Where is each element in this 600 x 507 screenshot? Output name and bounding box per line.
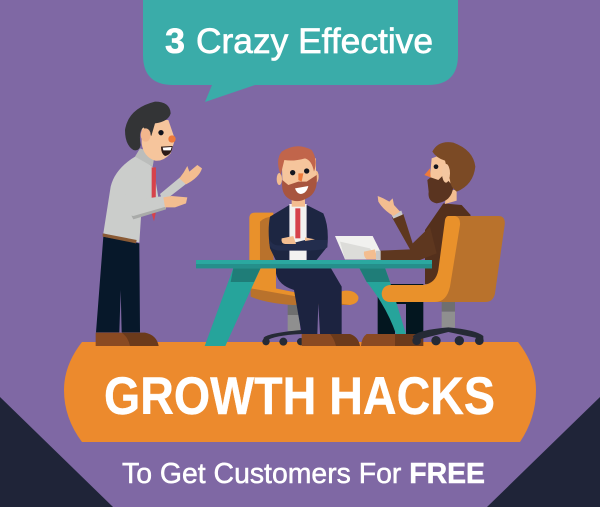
face	[282, 158, 316, 195]
neck	[135, 148, 155, 167]
mouth	[161, 146, 173, 156]
mouth	[295, 186, 308, 194]
near arm	[124, 175, 166, 216]
speech bubble	[143, 0, 458, 102]
corner triangle: right	[487, 397, 600, 507]
standing man	[96, 102, 202, 346]
bubble heading: 3	[165, 22, 185, 61]
belt	[103, 233, 137, 243]
left chair base	[262, 305, 304, 346]
ears	[277, 171, 319, 185]
laptop	[335, 236, 380, 259]
bearded man trousers	[378, 284, 423, 334]
bubble heading: Crazy Effective	[196, 22, 433, 61]
tie	[152, 167, 156, 221]
white shirt	[289, 204, 307, 261]
eye	[158, 130, 164, 135]
table hand	[364, 249, 381, 260]
navy trousers	[276, 267, 342, 334]
nose	[298, 173, 303, 182]
eye	[434, 164, 438, 169]
navy jacket	[269, 205, 328, 261]
face	[142, 120, 175, 161]
red hair	[278, 146, 316, 175]
crossed arms	[269, 238, 327, 251]
raised hand	[378, 196, 400, 216]
folded hand	[281, 236, 315, 244]
near arm shadow	[125, 203, 166, 219]
raised hand	[179, 165, 202, 184]
brown hair	[432, 142, 475, 192]
shoes	[302, 334, 360, 346]
dark beard	[427, 175, 453, 203]
seated man and table	[196, 142, 505, 346]
near hand	[163, 196, 187, 207]
table legs	[205, 268, 261, 346]
face	[430, 153, 452, 187]
raised cuff	[391, 211, 403, 219]
bearded man torso	[425, 203, 471, 287]
orange banner	[64, 342, 536, 442]
nose	[168, 135, 176, 143]
far arm	[160, 177, 186, 202]
neck	[292, 198, 305, 207]
bearded man shoes	[361, 334, 423, 346]
eyes	[290, 168, 309, 175]
right chair	[382, 216, 505, 302]
neck	[445, 190, 457, 204]
shoes	[96, 333, 132, 346]
table top	[196, 260, 432, 268]
banner title: GROWTH HACKS	[104, 367, 495, 426]
left chair	[249, 213, 358, 305]
ear	[442, 164, 450, 183]
nose	[424, 168, 431, 177]
raised arm	[380, 214, 437, 260]
red beard	[282, 175, 317, 201]
shirt	[103, 156, 159, 243]
red tie	[295, 208, 300, 238]
ear	[141, 128, 151, 142]
hair	[125, 102, 171, 150]
subtitle: To Get Customers For FREE	[122, 458, 485, 490]
table	[196, 260, 432, 346]
corner triangle: left	[0, 397, 113, 507]
trousers	[96, 237, 140, 332]
right chair base	[412, 302, 484, 345]
